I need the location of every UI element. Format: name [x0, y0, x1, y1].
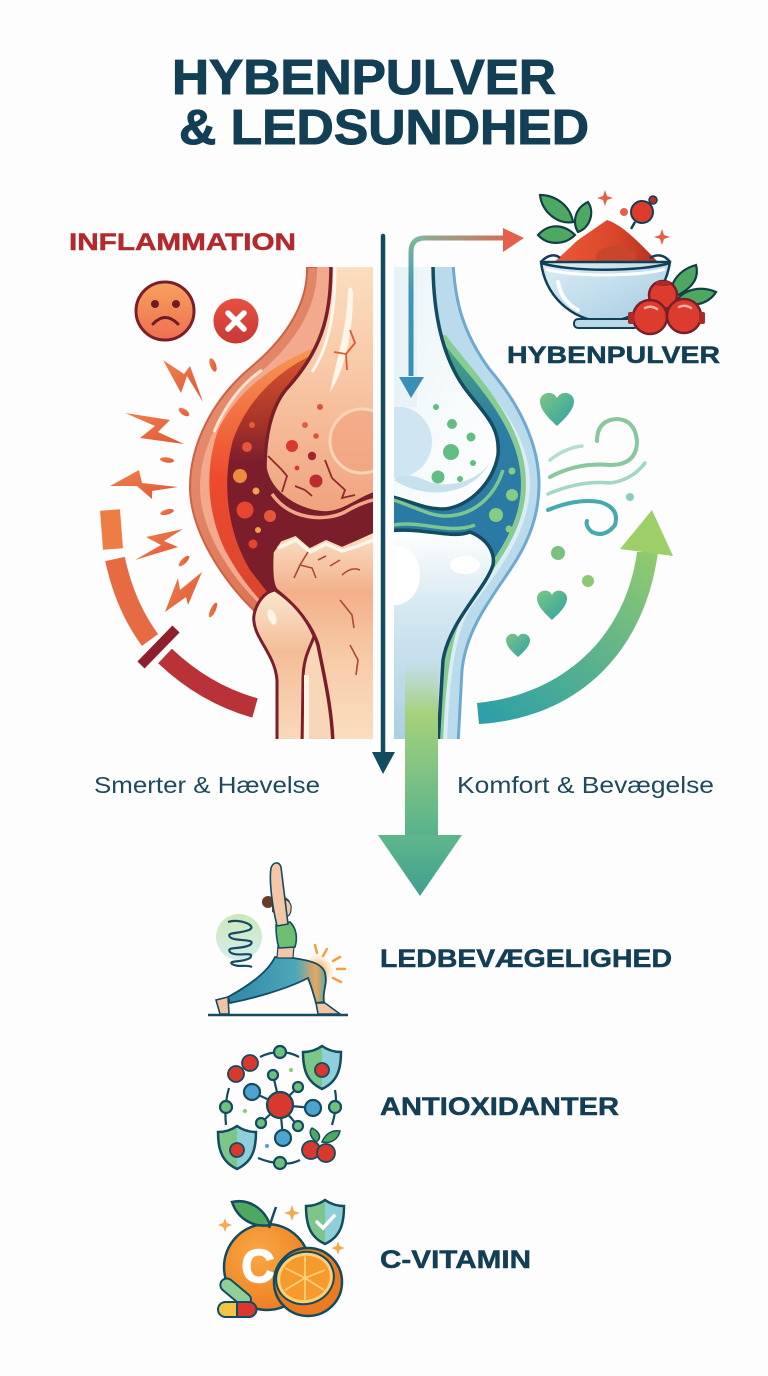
- capsule inner band: [443, 394, 530, 739]
- tibia white rim: [278, 540, 373, 552]
- head: [280, 900, 291, 917]
- bone particles: [432, 404, 476, 484]
- glow: [301, 955, 333, 987]
- label: c-vitamin: C-VITAMIN: [380, 1246, 531, 1274]
- improvement arrow: [477, 510, 673, 724]
- capsule inner band: [200, 267, 330, 602]
- capsule pill: [218, 1302, 256, 1317]
- cartilage rim: [272, 494, 373, 518]
- green nodes: [220, 1046, 341, 1169]
- bowl: [541, 262, 670, 322]
- icon: yoga pose: [208, 863, 348, 1015]
- tibia: [394, 528, 496, 739]
- femur highlight strip: [330, 287, 353, 392]
- icon: powder bowl: [538, 190, 716, 334]
- pants: [228, 957, 326, 1003]
- powder: [550, 220, 662, 266]
- right joint: healthy: [394, 267, 540, 739]
- femur ball: [394, 407, 432, 478]
- fibula: [254, 590, 314, 745]
- heading: inflammation: INFLAMMATION: [69, 229, 296, 256]
- ground: [208, 1014, 348, 1016]
- bowl foot: [574, 319, 638, 328]
- icon: hearts: [506, 393, 574, 657]
- fibula gap: [304, 675, 309, 739]
- femur soft shadow: [394, 462, 490, 492]
- green pill: [218, 1276, 254, 1309]
- healing particles: [551, 493, 634, 587]
- letter C: C: [241, 1240, 275, 1292]
- caption: komfort: Komfort & Bevægelse: [457, 772, 714, 798]
- lesions: [286, 404, 323, 488]
- side leaves: [671, 265, 716, 305]
- cream highlight: [214, 370, 262, 432]
- orange body: [224, 1224, 310, 1310]
- feet: [216, 997, 340, 1014]
- bone panel pale top: [394, 344, 417, 407]
- outer capsule: [434, 267, 540, 739]
- rays: [315, 945, 345, 982]
- tibia: [273, 533, 373, 739]
- tibia cracks: [294, 552, 360, 675]
- tibia highlight: [450, 556, 480, 574]
- hair: [262, 896, 290, 916]
- left joint: inflamed: [189, 267, 373, 739]
- icon: antioxidant molecule: [218, 1046, 341, 1169]
- label: hybenpulver: HYBENPULVER: [507, 342, 720, 369]
- sparkles: [597, 190, 670, 245]
- icon: sad face: [136, 282, 194, 340]
- central divider arrow: [372, 236, 395, 774]
- arms: [270, 863, 288, 926]
- label: ledbevaegelighed: LEDBEVÆGELIGHED: [380, 945, 672, 973]
- cartilage lines: [394, 470, 503, 529]
- title: & LEDSUNDHED: [179, 101, 589, 155]
- red berries: [228, 1055, 335, 1162]
- shield: [306, 1200, 344, 1244]
- big down arrow: [378, 660, 462, 896]
- icon: vitamin c orange: [218, 1200, 345, 1317]
- label: antioxidanter: ANTIOXIDANTER: [380, 1093, 619, 1121]
- synovial cavity: [227, 357, 373, 592]
- top berry: [631, 196, 657, 229]
- small dots: [289, 1068, 293, 1072]
- title: HYBENPULVER: [172, 51, 556, 105]
- elbow arrow: [399, 228, 524, 398]
- midriff: [277, 946, 294, 958]
- icon: x mark: [214, 298, 258, 344]
- berries: [633, 281, 701, 334]
- bowl rim: [541, 255, 670, 270]
- icon: wind swirls: [548, 419, 645, 534]
- femur: [394, 267, 500, 511]
- bonds: [252, 1075, 313, 1138]
- leaves: [538, 195, 591, 243]
- synovial cavity: [394, 346, 521, 558]
- shields: [218, 1046, 341, 1169]
- torso top: [276, 922, 296, 948]
- cherry leaves: [310, 1128, 340, 1143]
- title: [172, 51, 589, 155]
- sparkles: [218, 1205, 345, 1255]
- cavity particles: [489, 468, 518, 532]
- centre atom: [267, 1092, 293, 1118]
- orange slice: [274, 1248, 342, 1316]
- shaft fill: [304, 640, 331, 739]
- cavity particles: [233, 422, 276, 548]
- orange band: [209, 348, 313, 599]
- cracks: [268, 330, 355, 498]
- leaf: [232, 1201, 270, 1226]
- femur: [265, 262, 380, 513]
- femur ball: [328, 408, 373, 474]
- blue nodes: [244, 1084, 321, 1146]
- green band: [440, 335, 526, 739]
- spring: [216, 914, 262, 960]
- outer ring: [225, 1052, 336, 1164]
- infographic canvas: [70, 60, 720, 1318]
- berry details: [628, 281, 705, 324]
- icon: pain lightning bolts: [110, 357, 219, 618]
- pain arc arrow: [110, 510, 255, 708]
- outer capsule: [189, 267, 317, 612]
- caption: smerter: Smerter & Hævelse: [94, 772, 320, 798]
